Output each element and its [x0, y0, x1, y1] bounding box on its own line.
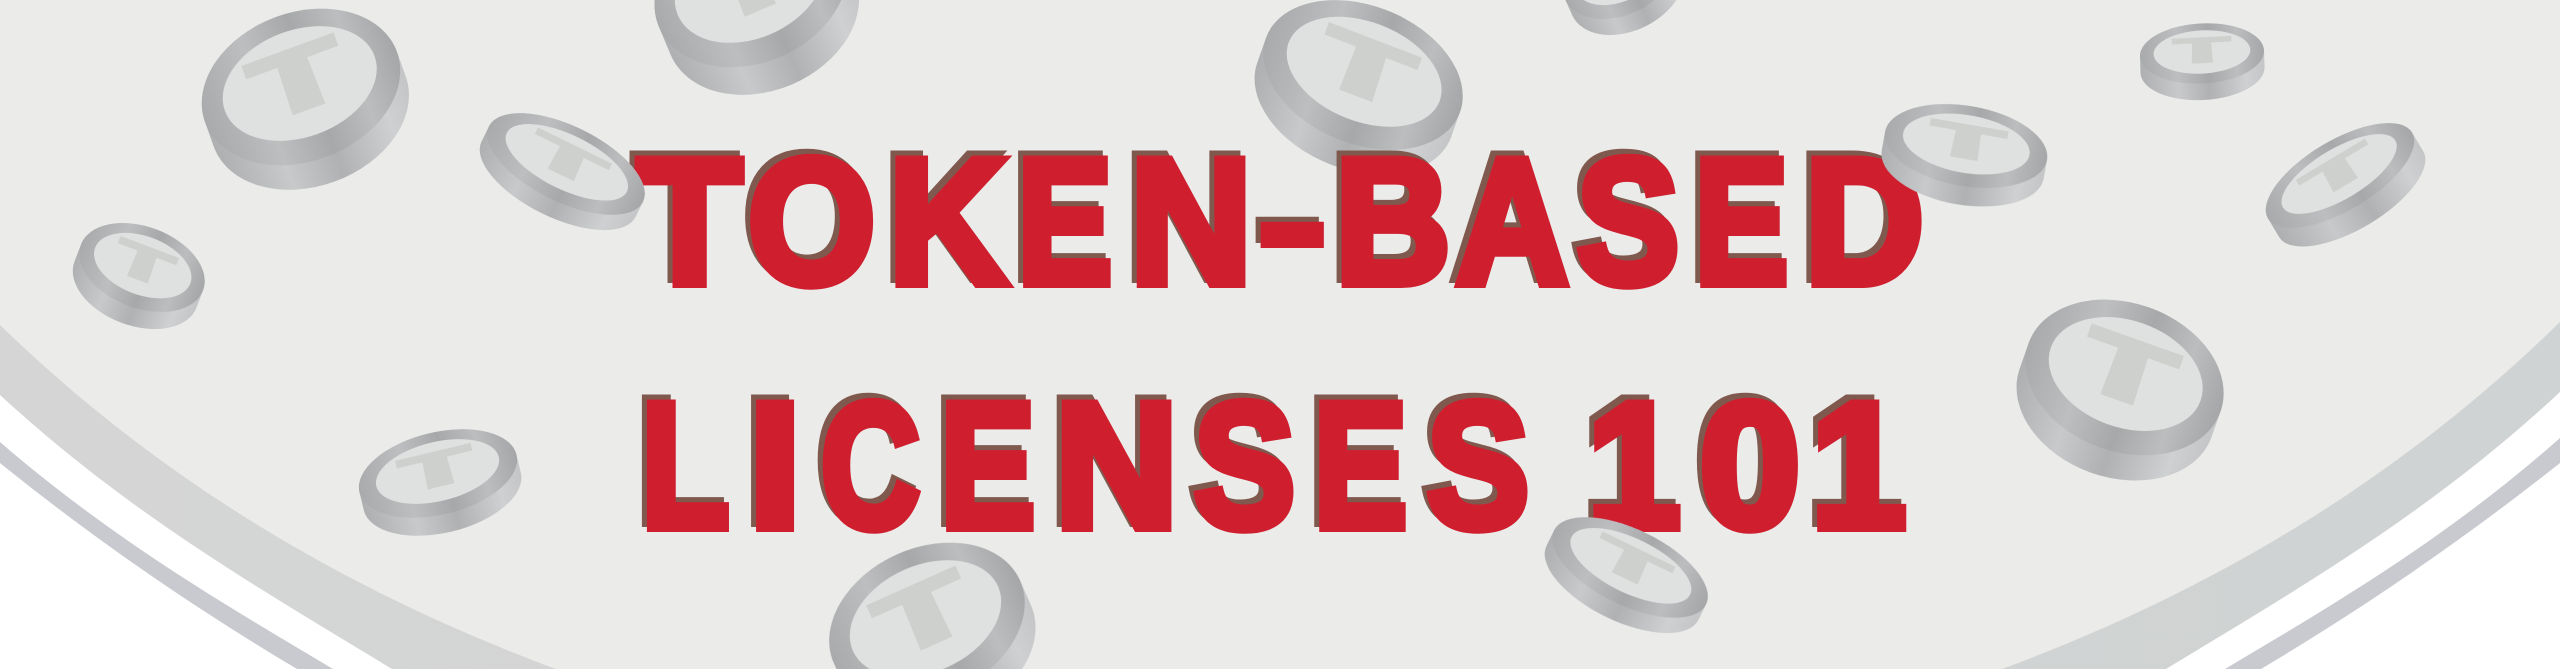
- title line 1: TOKEN-BASED: N: [1130, 122, 1252, 321]
- title: [637, 120, 1924, 566]
- icon: large coin cropped at bottom edge: [829, 542, 1036, 669]
- icon: large coin, top left: [180, 0, 422, 192]
- icon: small coin, far left: [66, 206, 218, 328]
- icon: small coin cropped at top edge, centre right: [1566, 0, 1676, 35]
- title line 2: LICENSES 101: N: [1055, 366, 1178, 565]
- icon: small coin, top right: [2139, 20, 2265, 86]
- title line 2: LICENSES 101: E: [941, 367, 1035, 566]
- title line 1: TOKEN-BASED: K: [889, 123, 1007, 322]
- title line 2: LICENSES 101: 1: [1588, 366, 1681, 565]
- title line 2: LICENSES 101: I: [749, 365, 801, 565]
- title line 1: TOKEN-BASED: A: [1456, 123, 1568, 321]
- title line 2: LICENSES 101: 1: [1811, 366, 1906, 565]
- icon: large coin, lower right: [2004, 274, 2245, 482]
- icon: coin overlapping digit 1: [1537, 496, 1723, 638]
- icon: tilted coin, far right: [2250, 102, 2430, 248]
- title line 2: LICENSES 101: S: [1194, 367, 1295, 566]
- icon: coin overlapping letter D: [1878, 92, 2054, 200]
- title line 1: TOKEN-BASED: O: [748, 123, 875, 322]
- title line 2: LICENSES 101: C: [821, 366, 920, 565]
- title line 1: TOKEN-BASED: S: [1577, 123, 1679, 322]
- title line 1: TOKEN-BASED: [637, 120, 1924, 322]
- title line 1: TOKEN-BASED: B: [1335, 122, 1450, 321]
- title line 1: TOKEN-BASED: -: [1255, 120, 1330, 319]
- title line 2: LICENSES 101: S: [1427, 367, 1529, 566]
- title line 1: TOKEN-BASED: D: [1805, 123, 1924, 321]
- title line 2: LICENSES 101: [641, 365, 1906, 566]
- title line 2: LICENSES 101: L: [641, 367, 729, 565]
- title line 1: TOKEN-BASED: E: [1695, 122, 1788, 321]
- title line 2: LICENSES 101: E: [1314, 366, 1407, 565]
- icon: coin cropped at top edge, centre left: [654, 0, 859, 95]
- title line 1: TOKEN-BASED: T: [637, 122, 742, 321]
- icon: coin behind title, upper centre: [1243, 0, 1483, 177]
- icon: coin, lower left: [350, 415, 526, 532]
- title line 1: TOKEN-BASED: E: [1018, 123, 1112, 322]
- icon: coin overlapping letter T: [472, 92, 660, 236]
- title line 2: LICENSES 101: 0: [1700, 367, 1800, 566]
